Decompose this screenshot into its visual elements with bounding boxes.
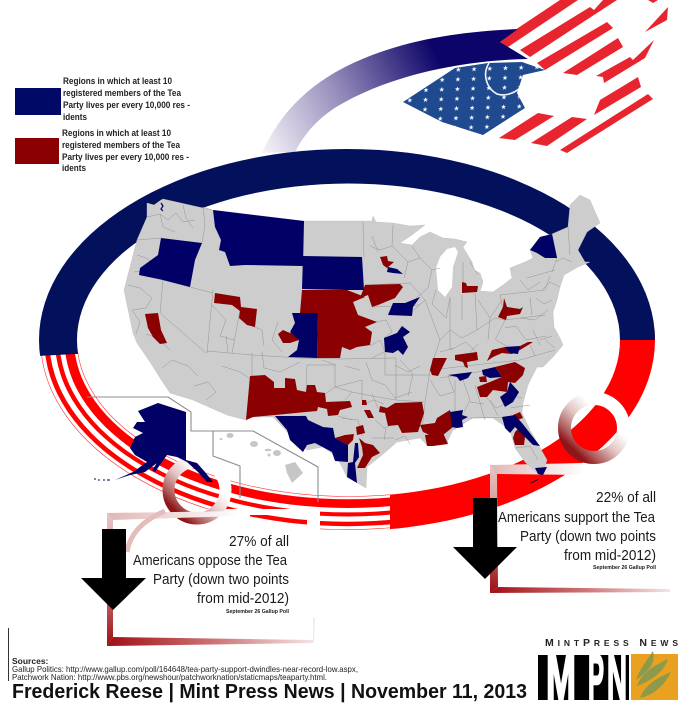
text: oppose statistic: Americans oppose the Tea: [133, 552, 288, 569]
legend: red description: registered members of the Tea: [62, 140, 181, 150]
stripe fragment inside callout 1: [250, 515, 307, 524]
text: support statistic: Party (down two points: [520, 528, 656, 545]
text: oppose statistic: 27% of all: [229, 533, 289, 550]
text: oppose statistic: from mid-2012): [197, 590, 289, 607]
text: support statistic: September 26 Gallup Poll: [593, 565, 656, 571]
flag red stripes: [499, 0, 668, 153]
sources: Gallup Politics: http://www.gallup.com/poll/164648/tea-party-support-dwindles-near-record-low.aspx,: [12, 664, 358, 674]
land outline: [124, 195, 600, 488]
sources: Patchwork Nation: http://www.pbs.org/newshour/patchworknation/staticmaps/teaparty.html.: [12, 672, 327, 682]
legend: red description: [62, 128, 189, 173]
sources: [12, 656, 358, 682]
legend: blue description: Party lives per every 10,000 res -: [63, 100, 190, 110]
circle marker on striped ring: [168, 462, 226, 518]
oval ring: red support segment: [390, 330, 655, 530]
text: support statistic: from mid-2012): [564, 547, 656, 564]
text: support statistic: Americans support the Tea: [498, 509, 656, 526]
legend: blue description: [63, 76, 190, 122]
map inset: Hawaii: [220, 433, 303, 483]
ribbon from oval to flag: [262, 29, 528, 153]
circle marker on red ring: [564, 398, 624, 458]
inset connector lines: [87, 397, 318, 502]
text: oppose statistic: [133, 533, 289, 615]
arrow: oppose down: [81, 529, 146, 610]
logo: Mint Press News: M INT P RESS N EWS: [545, 637, 678, 649]
text: oppose statistic: Party (down two points: [153, 571, 289, 588]
Lake Michigan: [436, 247, 458, 297]
regions with blue designation: [139, 203, 557, 483]
oval ring: navy top segment: [39, 149, 655, 356]
sources: Sources:: [12, 656, 49, 666]
oval ring: striped oppose segment: [41, 353, 390, 530]
regions with red designation: [145, 256, 533, 468]
legend: red description: Party lives per every 10,000 res -: [62, 152, 189, 162]
logo: Mint Press News: [538, 639, 678, 700]
county and district boundaries: [128, 205, 572, 460]
callout frame: support: [490, 463, 670, 593]
legend: blue swatch: [15, 88, 61, 115]
callout frame: oppose: [107, 511, 315, 646]
text: oppose statistic: September 26 Gallup Poll: [226, 609, 289, 615]
text: support statistic: [498, 489, 656, 571]
footer rule: [8, 628, 9, 681]
map inset: Alaska: [94, 403, 213, 482]
flag star field: [403, 62, 545, 135]
map: continental United States: [124, 195, 600, 488]
legend: blue description: Regions in which at least 10: [63, 76, 172, 86]
legend: blue description: idents: [63, 112, 87, 122]
byline: Frederick Reese | Mint Press News | November 11, 2013: [12, 681, 527, 703]
legend: red swatch: [15, 138, 59, 164]
text: support statistic: 22% of all: [596, 489, 656, 506]
legend: red description: idents: [62, 163, 86, 173]
legend: blue description: registered members of the Tea: [63, 88, 182, 98]
icon: tattered American flag: [403, 0, 668, 153]
arrow: support down: [453, 498, 517, 579]
callout box 1 background: [113, 509, 320, 640]
legend: red description: Regions in which at least 10: [62, 128, 171, 138]
